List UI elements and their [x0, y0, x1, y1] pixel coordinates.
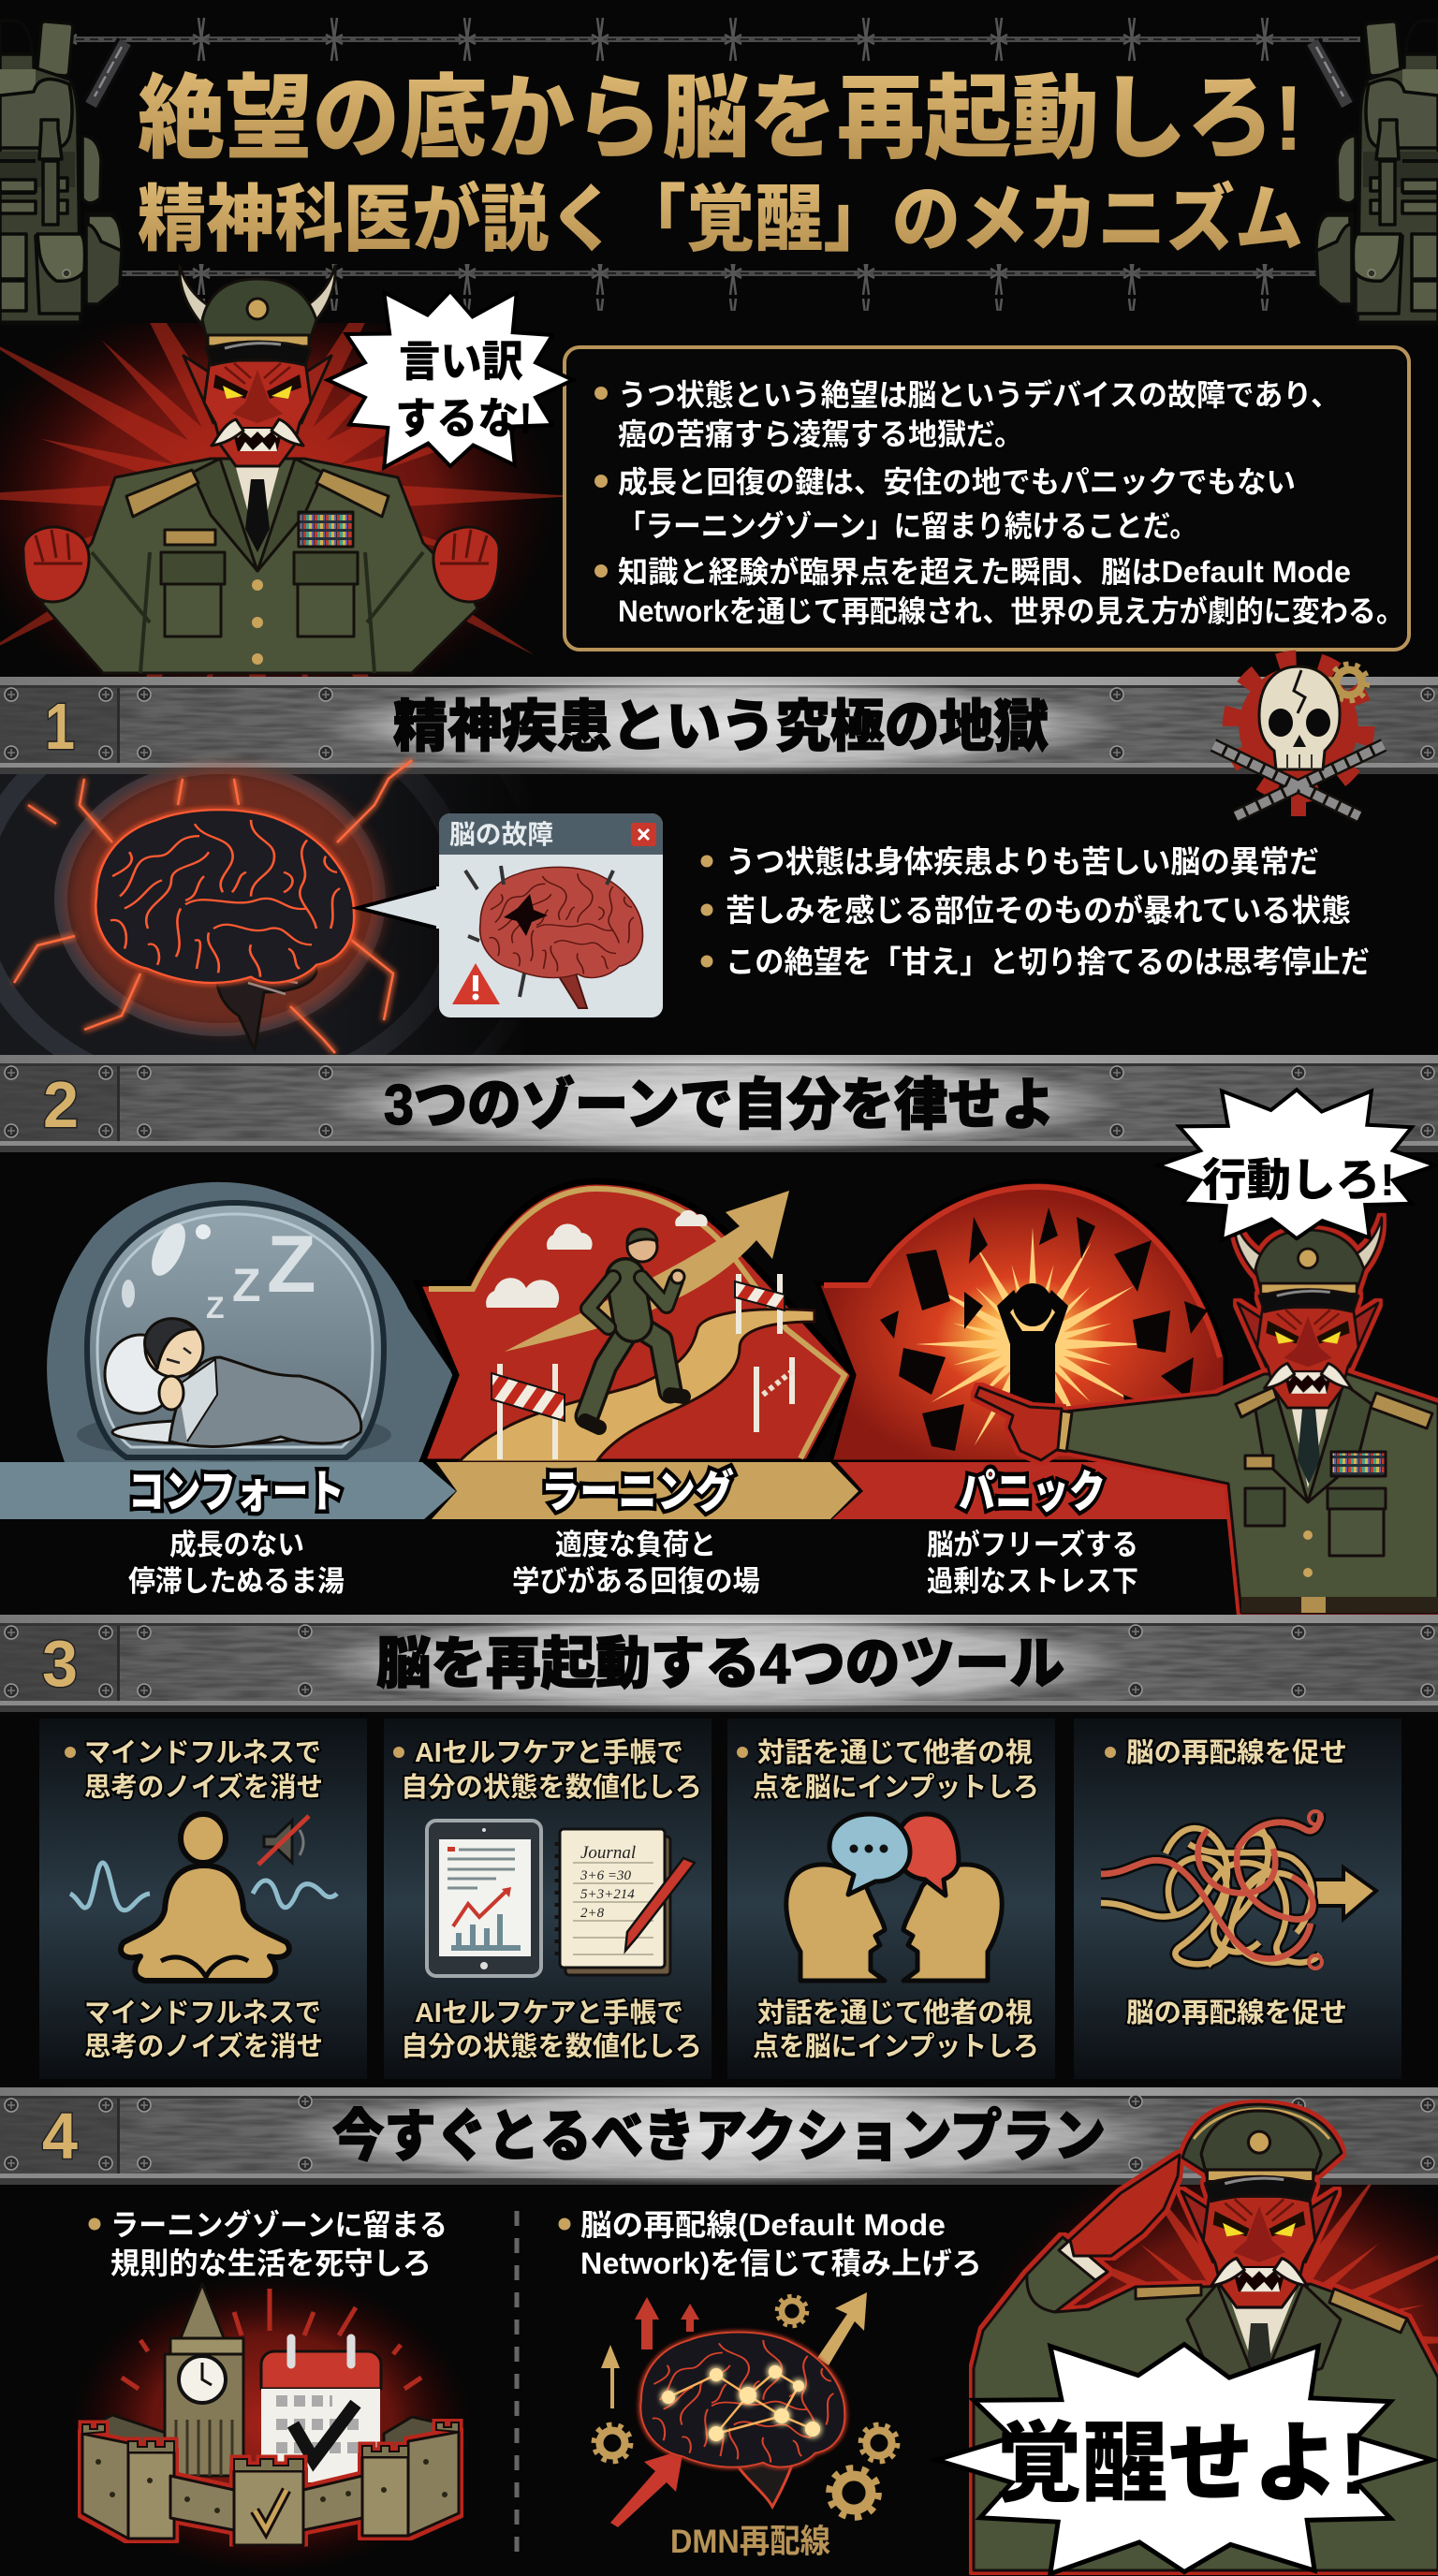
icon: left backpack [0, 21, 125, 323]
summary bullets: Networkを通じて再配線され、世界の見え方が劇的に変わる。 [618, 594, 1404, 628]
back wall [94, 2415, 454, 2471]
section 1 header bar [0, 677, 1438, 774]
title: 精神科医が説く「覚醒」のメカニズム [138, 178, 1303, 260]
icon: tangled wires to arrow [1101, 1811, 1376, 1969]
summary bullets: 知識と経験が臨界点を超えた瞬間、脳はDefault Mode [618, 555, 1351, 589]
icon: meditating figure [70, 1814, 337, 1981]
summary bullets [594, 378, 1404, 628]
zone label band: learning: ラーニング [541, 1467, 734, 1517]
section 3 header bar: 3 [42, 1627, 78, 1700]
hurdles [492, 1274, 792, 1459]
speech burst: awaken [936, 2344, 1432, 2574]
action 1 text: ラーニングゾーンに留まる [110, 2208, 448, 2242]
section 1 header bar: 1 [45, 690, 75, 763]
icon: right backpack [1313, 21, 1438, 323]
icon: fortress with clock and calendar [70, 2275, 473, 2574]
shards [880, 1208, 1208, 1451]
section 1 bullets: うつ状態は身体疾患よりも苦しい脳の異常だ [726, 844, 1319, 879]
icon: journal: 5+3+214 [580, 1887, 635, 1902]
icon: journal: Journal [580, 1843, 636, 1863]
speech burst: act [1158, 1090, 1435, 1239]
icon: journal: 2+8 [580, 1906, 605, 1921]
bottom barbed wire [122, 264, 1320, 311]
explosion rays [916, 1227, 1150, 1461]
section 1 bullets: この絶望を「甘え」と切り捨てるのは思考停止だ [726, 944, 1370, 979]
zone descriptions: 学びがある回復の場 [512, 1565, 760, 1598]
zone label band: panic [832, 1462, 1236, 1519]
panel: dialogue: 点を脳にインプットしろ [753, 1772, 1039, 1803]
glass dome [87, 1203, 384, 1457]
caption: DMN rewiring: DMN再配線 [670, 2524, 830, 2560]
close button [631, 823, 656, 846]
icon: cracked red brain [465, 866, 643, 1008]
title [138, 66, 1303, 260]
speech burst: act: 行動しろ! [1202, 1156, 1395, 1206]
zone: comfort [47, 1182, 454, 1462]
zone label band: panic: パニック [959, 1468, 1106, 1517]
zone descriptions: 停滞したぬるま湯 [128, 1565, 345, 1598]
action 1 text [88, 2208, 448, 2280]
panel: AI self care and journal: 自分の状態を数値化しろ [401, 2031, 702, 2062]
panel: rewiring: 脳の再配線を促せ [1126, 1998, 1347, 2028]
character: oni officer with fists [23, 266, 499, 673]
oni head [180, 266, 335, 466]
speech burst: excuses [328, 291, 573, 468]
summary bullets: 成長と回復の鍵は、安住の地でもパニックでもない [618, 465, 1296, 499]
popup: brain failure: 脳の故障 [449, 820, 553, 849]
zone descriptions: 脳がフリーズする [927, 1529, 1138, 1561]
panel: summary box [565, 347, 1409, 650]
soldier running [585, 1229, 684, 1427]
clouds [486, 1210, 708, 1308]
zone: panic [817, 1181, 1225, 1462]
panel: AI self care and journal: AIセルフケアと手帳で [415, 1998, 683, 2028]
zzz [206, 1220, 316, 1325]
zone label band: comfort: コンフォート [128, 1468, 345, 1517]
panicking person [997, 1283, 1068, 1404]
section 2 header bar: 2 [43, 1068, 79, 1141]
pointing hand [976, 1387, 1062, 1460]
icon: sleeper [105, 1319, 361, 1446]
action 1 text: 規則的な生活を死守しろ [110, 2247, 432, 2280]
character: oni officer pointing [976, 1218, 1438, 1613]
summary bullets: 癌の苦痛すら凌駕する地獄だ。 [618, 417, 1023, 451]
oni head [1234, 1218, 1382, 1408]
panel: rewiring [1074, 1719, 1401, 2079]
zone label band: comfort [0, 1462, 456, 1519]
top barbed wire [73, 16, 1360, 63]
zzz: Z [267, 1220, 316, 1310]
zone: learning [418, 1181, 854, 1462]
panel: dialogue: 対話を通じて他者の視 [757, 1737, 1033, 1768]
dashed divider [515, 2211, 519, 2552]
section 1 swirl background [0, 774, 502, 1055]
icon: journal [558, 1829, 695, 1975]
road [459, 1310, 814, 1462]
action 2 text [558, 2208, 982, 2280]
panel: dialogue [727, 1719, 1055, 2079]
neural nodes [662, 2365, 820, 2441]
saluting hand [1070, 2155, 1180, 2256]
title: 絶望の底から脳を再起動しろ! [138, 66, 1303, 169]
growth arrow [505, 1191, 789, 1352]
zone descriptions: 過剰なストレス下 [927, 1565, 1138, 1598]
action 2 text: 脳の再配線(Default Mode [580, 2208, 946, 2242]
icon: journal: 3+6 =30 [580, 1868, 631, 1883]
section 4 header bar [0, 2086, 1438, 2185]
section 3 header bar [0, 1614, 1438, 1712]
section 1 bullets [700, 844, 1370, 979]
panel: dialogue: 点を脳にインプットしろ [753, 2031, 1039, 2062]
panel: mindfulness [39, 1719, 367, 2079]
icon: burning brain [14, 760, 412, 1053]
zone descriptions: 適度な負荷と [555, 1529, 716, 1561]
zone descriptions: 成長のない [169, 1529, 304, 1561]
panel: AI self care and journal [384, 1719, 712, 2079]
section 2 header bar [0, 1055, 1438, 1152]
section 4 red burst background [1015, 2185, 1438, 2364]
panel: rewiring: 脳の再配線を促せ [1126, 1737, 1347, 1768]
clock tower [165, 2284, 243, 2476]
icon: two heads talking [786, 1814, 1002, 1981]
hero red burst background [0, 323, 563, 677]
icon: rewired glowing brain with arrows and gears [594, 2292, 897, 2527]
summary bullets: 「ラーニングゾーン」に留まり続けることだ。 [618, 509, 1197, 543]
wall [82, 2422, 459, 2545]
icon: broken skull emblem [1213, 660, 1384, 816]
oni head with wide cap [1181, 2104, 1342, 2307]
panel: mindfulness: マインドフルネスで [84, 1998, 321, 2028]
section 2 header bar: 3つのゾーンで自分を律せよ [384, 1074, 1055, 1136]
speech burst: excuses: するな! [395, 394, 533, 443]
arrows [601, 2292, 867, 2527]
character: oni officer saluting [974, 2104, 1438, 2570]
action 2 text: Network)を信じて積み上げろ [580, 2247, 982, 2280]
zone descriptions [128, 1529, 1138, 1598]
panel: dialogue: 対話を通じて他者の視 [757, 1998, 1033, 2028]
zzz: Z [206, 1291, 225, 1325]
section 3 header bar: 脳を再起動する4つのツール [376, 1632, 1064, 1695]
popup: brain failure [358, 813, 663, 1017]
section 1 header bar: 精神疾患という究極の地獄 [393, 695, 1049, 758]
calendar [261, 2338, 381, 2482]
right fist [433, 527, 499, 602]
icon: tablet chart [427, 1821, 541, 1976]
speech burst: excuses: 言い訳 [399, 337, 523, 386]
section 4 header bar: 4 [42, 2100, 78, 2173]
zzz: Z [232, 1259, 261, 1311]
summary bullets: うつ状態という絶望は脳というデバイスの故障であり、 [618, 378, 1340, 412]
panel: AI self care and journal: 自分の状態を数値化しろ [401, 1772, 702, 1803]
panel: mindfulness: 思考のノイズを消せ [84, 2030, 323, 2062]
panel: AI self care and journal: AIセルフケアと手帳で [415, 1737, 683, 1768]
zone label band: learning [432, 1462, 858, 1519]
speech burst: awaken: 覚醒せよ! [996, 2414, 1368, 2512]
panel: mindfulness: 思考のノイズを消せ [84, 1771, 323, 1803]
icon: warning triangle [452, 963, 500, 1004]
section 4 header bar: 今すぐとるべきアクションプラン [332, 2105, 1106, 2168]
gears [594, 2296, 897, 2517]
section 1 bullets: 苦しみを感じる部位そのものが暴れている状態 [726, 893, 1351, 928]
left fist [23, 527, 89, 602]
panel: mindfulness: マインドフルネスで [84, 1738, 321, 1768]
